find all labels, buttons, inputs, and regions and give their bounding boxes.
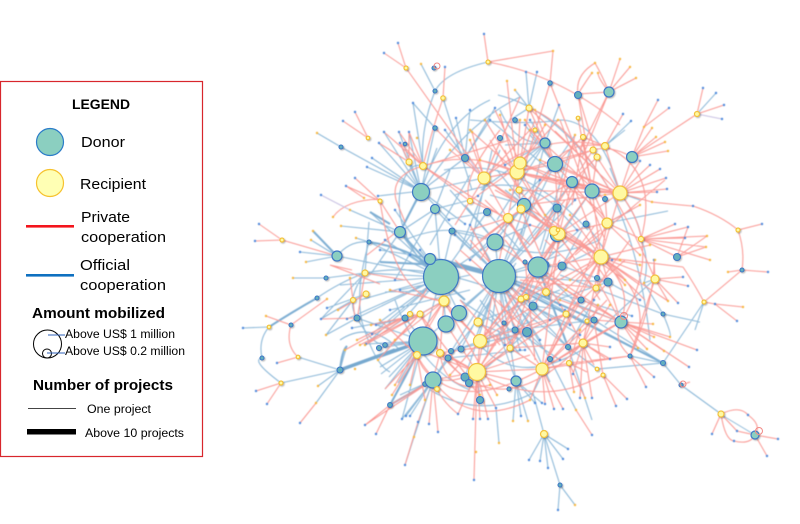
small donor nodes (260, 66, 744, 487)
private cooperation label: cooperation (81, 229, 166, 246)
nodes (260, 60, 759, 487)
private cooperation edges (255, 34, 778, 480)
recipient nodes (267, 60, 740, 438)
official cooperation label: Official (80, 257, 130, 274)
line: above 10 projects (27, 429, 76, 434)
line: private cooperation (26, 225, 74, 228)
above 10 projects label: Above 10 projects (85, 428, 184, 440)
official links on top of private (340, 93, 755, 437)
amount labels: Above US$ 0.2 million (65, 346, 185, 358)
amount mobilized heading: Amount mobilized (32, 305, 165, 322)
line: one project (28, 408, 76, 409)
amount labels: Above US$ 1 million (65, 329, 175, 341)
self-loops (434, 63, 762, 434)
leaf dots (243, 34, 778, 510)
number of projects heading: Number of projects (33, 377, 173, 394)
thick official cooperation links (269, 191, 663, 405)
panel: legend (0, 82, 202, 456)
violet mixed edges (321, 114, 722, 210)
recipient label: Recipient (80, 176, 147, 193)
icon: recipient circle (36, 170, 64, 196)
large donor nodes (332, 87, 759, 439)
curved official arcs (340, 95, 650, 406)
icon: amount size circles (34, 330, 65, 358)
official cooperation edges (243, 62, 721, 510)
one project label: One project (87, 404, 152, 416)
line: official cooperation (26, 274, 74, 277)
curved private arcs (380, 108, 655, 411)
network graph (243, 34, 778, 510)
private cooperation label: Private (81, 209, 130, 226)
official cooperation label: cooperation (80, 277, 166, 294)
donor label: Donor (81, 134, 125, 151)
legend title: LEGEND (72, 96, 130, 112)
icon: donor circle (36, 128, 64, 156)
